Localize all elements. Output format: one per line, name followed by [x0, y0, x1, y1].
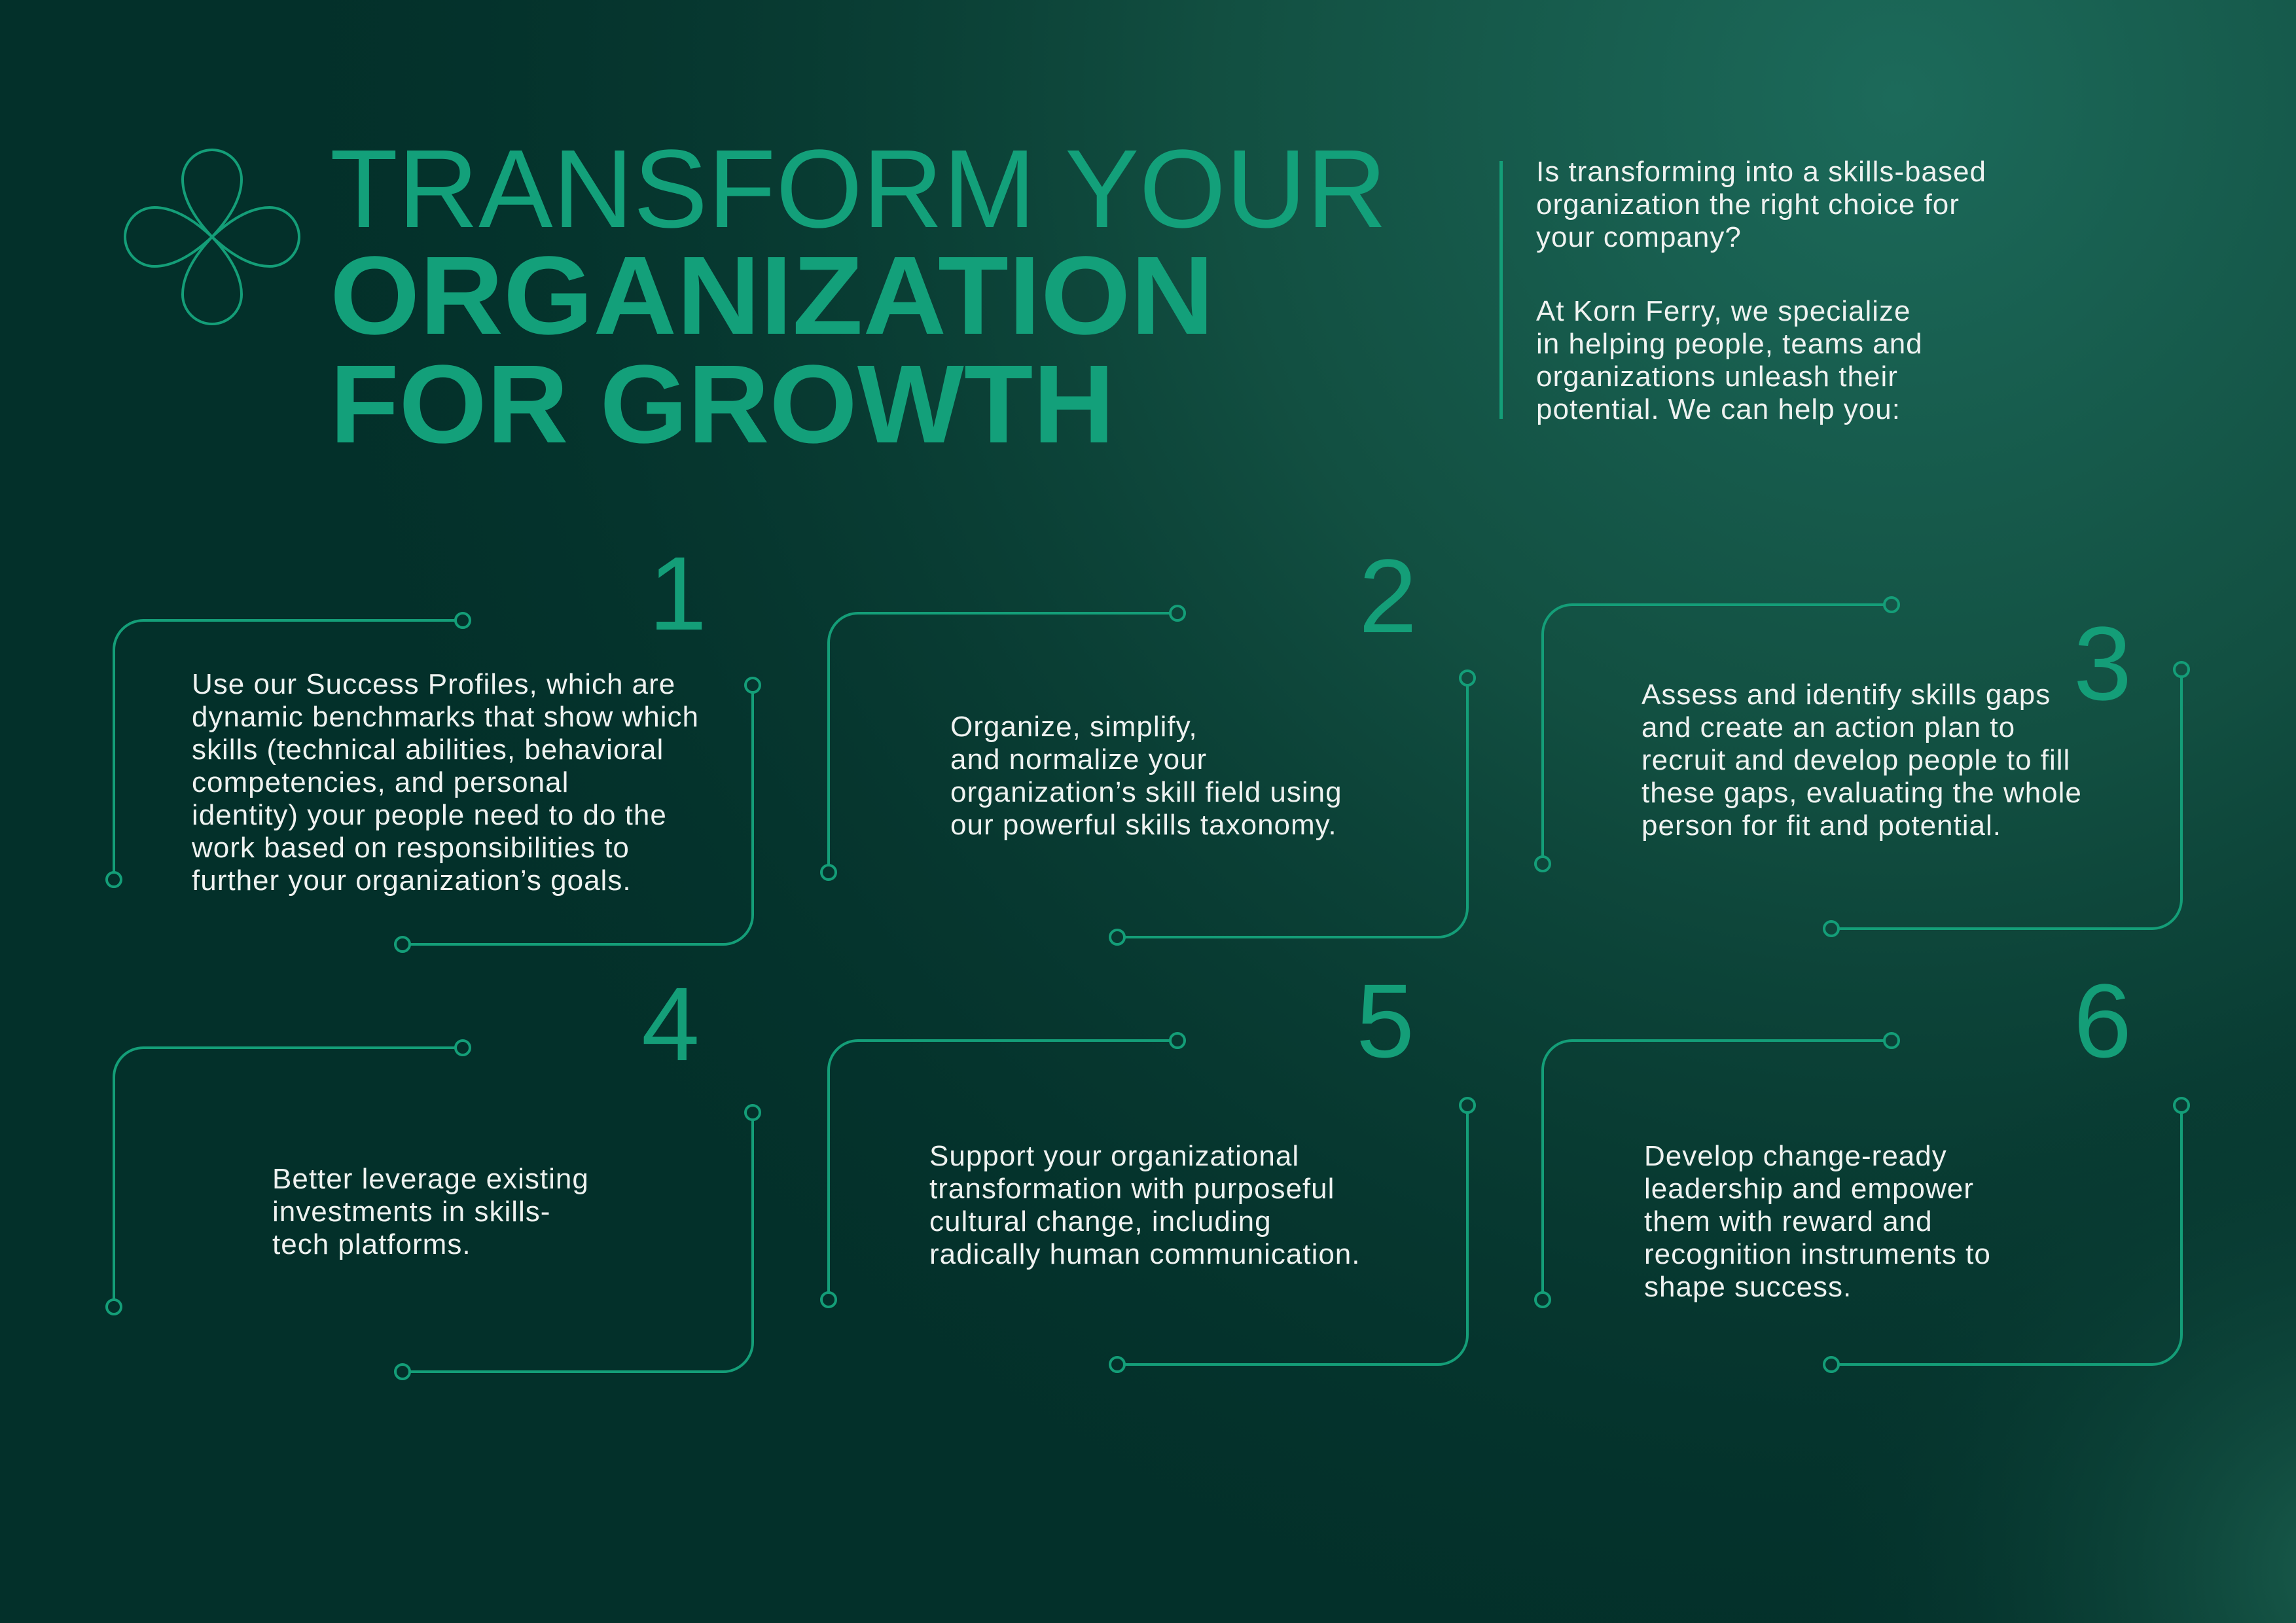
panel: step 5: radically human communication. [929, 1238, 1361, 1270]
panel: step 4: investments in skills- [272, 1196, 550, 1228]
panel: step 5: cultural change, including [929, 1205, 1272, 1238]
panel: step 5: 5 [1356, 962, 1414, 1079]
panel: step 5: Support your organizational [929, 1140, 1299, 1172]
panel: step 6: leadership and empower [1644, 1173, 1974, 1205]
intro text block: At Korn Ferry, we specialize [1536, 295, 1910, 327]
intro text block [1499, 156, 1995, 425]
panel: step 6 [1535, 962, 2189, 1372]
title: ORGANIZATION [330, 234, 1214, 358]
panel: step 1 [107, 535, 760, 952]
panel: step 5 [821, 962, 1475, 1372]
panel: step 1: identity) your people need to do the [192, 799, 667, 831]
panel: step 1: further your organization’s goals. [192, 865, 632, 897]
panel: step 3: recruit and develop people to fill [1641, 744, 2070, 776]
panel: step 6: shape success. [1644, 1271, 1852, 1303]
panel: step 2: our powerful skills taxonomy. [950, 809, 1337, 841]
intro text block: in helping people, teams and [1536, 328, 1923, 360]
panel: step 4: tech platforms. [272, 1228, 471, 1260]
panel: step 3: and create an action plan to [1641, 711, 2015, 743]
panel: step 2: and normalize your [950, 743, 1207, 776]
panel: step 4: Better leverage existing [272, 1163, 589, 1195]
panel: step 6: 6 [2073, 962, 2132, 1079]
panel: step 2: organization’s skill field using [950, 776, 1342, 808]
panel: step 1: dynamic benchmarks that show which [192, 701, 699, 733]
panel: step 3: 3 [2073, 605, 2132, 722]
intro text block: potential. We can help you: [1536, 393, 1901, 425]
panel: step 4 [107, 965, 760, 1379]
intro text block: organization the right choice for [1536, 188, 1960, 221]
panel: step 6: Develop change-ready [1644, 1140, 1947, 1172]
title [330, 127, 1387, 467]
title: FOR GROWTH [330, 342, 1115, 467]
panel: step 5: transformation with purposeful [929, 1173, 1335, 1205]
intro text block: organizations unleash their [1536, 361, 1898, 393]
panel: step 1: Use our Success Profiles, which are [192, 668, 675, 700]
panel: step 2 [821, 537, 1475, 944]
panel: step 6: them with reward and [1644, 1205, 1933, 1238]
intro text block: your company? [1536, 221, 1742, 253]
panel: step 6: recognition instruments to [1644, 1238, 1991, 1270]
panel: step 2: Organize, simplify, [950, 711, 1198, 743]
title: TRANSFORM YOUR [330, 127, 1387, 251]
panel: step 3 [1535, 597, 2189, 936]
intro text block: Is transforming into a skills-based [1536, 156, 1986, 188]
panel: step 1: skills (technical abilities, behavioral [192, 734, 664, 766]
panel: step 1: competencies, and personal [192, 766, 569, 798]
icon: clover logo [125, 150, 299, 324]
panel: step 3: these gaps, evaluating the whole [1641, 777, 2082, 809]
panel: step 3: Assess and identify skills gaps [1641, 679, 2051, 711]
panel: step 1: 1 [649, 535, 707, 652]
panel: step 2: 2 [1359, 537, 1417, 654]
panel: step 1: work based on responsibilities to [191, 832, 630, 864]
panel: step 3: person for fit and potential. [1641, 810, 2001, 842]
panel: step 4: 4 [641, 965, 700, 1082]
